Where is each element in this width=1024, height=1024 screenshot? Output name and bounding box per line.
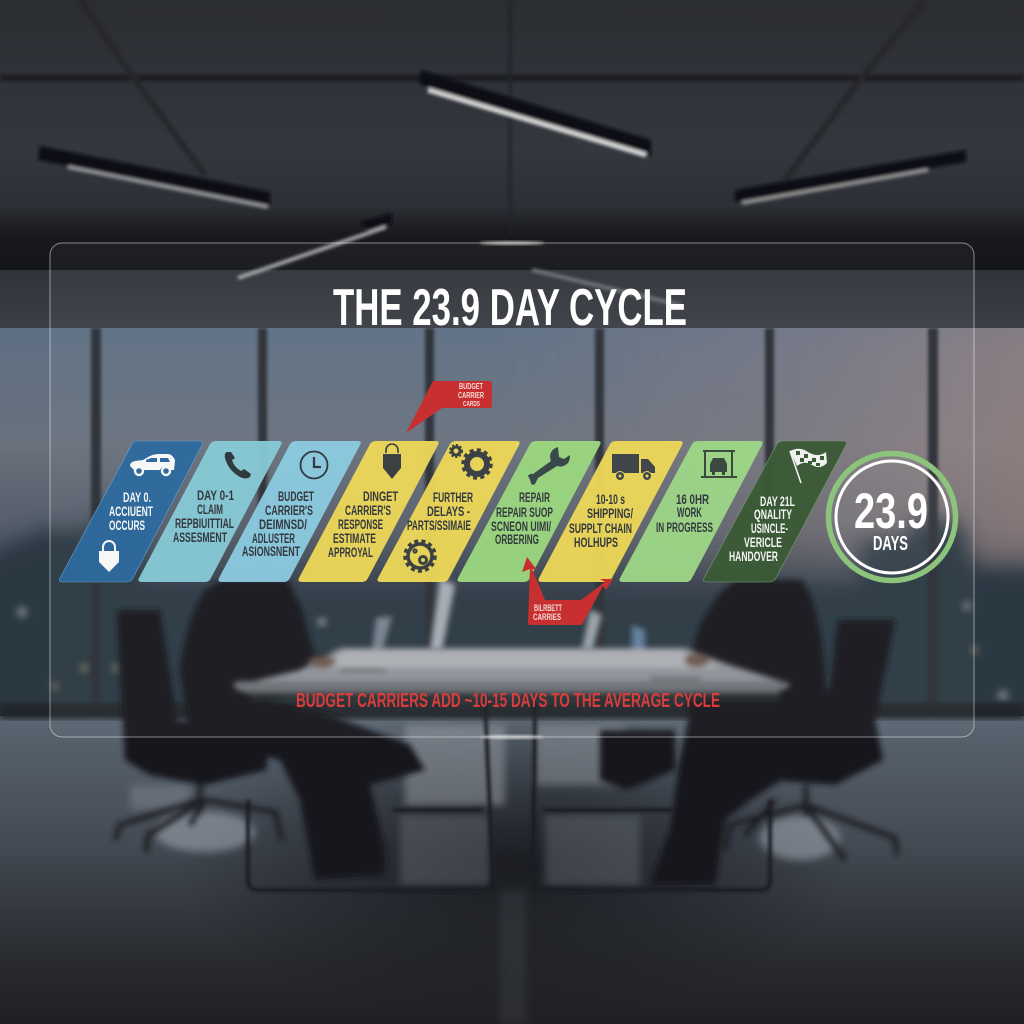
seated people and chairs xyxy=(115,580,897,885)
icon: wrench xyxy=(528,447,570,485)
right chair xyxy=(770,620,895,785)
step text xyxy=(328,489,399,560)
step text: CARRIER'S xyxy=(345,503,391,518)
icon: shield lock xyxy=(99,541,119,572)
table legs and frame xyxy=(248,700,770,890)
windows and city skyline xyxy=(0,328,1024,715)
step text: VERICLE xyxy=(744,535,782,550)
step text: DINGET xyxy=(363,489,399,504)
panel: work in progress xyxy=(619,441,763,582)
ceiling lights xyxy=(38,70,966,305)
step text: DEIMNSD/ xyxy=(259,517,307,532)
callout: budget carriers bottom with two arrows: BILRBETT xyxy=(534,603,562,613)
step text: FURTHER xyxy=(433,490,473,505)
step text: HOLHUPS xyxy=(574,535,618,550)
step text: REPAIR xyxy=(519,490,550,505)
callout: budget carriers bottom with two arrows xyxy=(522,557,613,625)
step text: ADLUSTER xyxy=(252,531,295,546)
callout: budget carrier top: CARRIER xyxy=(458,391,484,400)
step text: BUDGET xyxy=(278,489,314,504)
step text xyxy=(569,492,633,550)
monitors and laptops xyxy=(317,578,645,655)
step text xyxy=(729,494,795,564)
step text: ASSESMENT xyxy=(173,530,227,545)
panel: further delays xyxy=(377,441,520,582)
left person xyxy=(180,580,425,880)
step text xyxy=(656,492,713,535)
step text: REPAIR SUOP xyxy=(496,505,553,520)
panel: claim reported xyxy=(138,441,282,582)
step text: DAY 0-1 xyxy=(197,488,234,503)
icon: phone xyxy=(225,452,251,478)
title: THE 23.9 DAY CYCLE xyxy=(333,279,687,337)
step text: ASIONSNENT xyxy=(242,544,300,559)
icon: gears xyxy=(450,445,491,478)
step text: OCCURS xyxy=(109,518,145,533)
panel: quality check and vehicle handover xyxy=(703,441,847,582)
step text: USINCLE- xyxy=(751,521,788,536)
icon: delay gear xyxy=(405,541,435,571)
icon: checkered flag xyxy=(790,449,827,483)
step text: CARRIER'S xyxy=(265,503,313,518)
panel: repair shop scheduling and ordering xyxy=(457,441,601,582)
step text: 16 0HR xyxy=(676,492,709,507)
step text: 10-10 s xyxy=(596,492,625,507)
panel: shipping and supply chain holdups xyxy=(538,441,683,582)
glass panel xyxy=(50,241,974,739)
callout: budget carriers bottom with two arrows: CARRIES xyxy=(533,612,561,622)
icon: car on lift xyxy=(701,451,737,478)
step text: RESPONSE xyxy=(338,517,383,532)
conference table xyxy=(233,648,790,702)
panel: carrier's response estimate approval xyxy=(298,441,439,582)
total badge: 23.9 days xyxy=(828,454,956,580)
total badge: 23.9 days: DAYS xyxy=(873,533,908,555)
step text: SUPPLT CHAIN xyxy=(569,521,632,536)
step text: ACCIUENT xyxy=(109,504,153,519)
step text: DAY 0. xyxy=(123,490,151,505)
step text xyxy=(491,490,553,547)
step text: DELAYS - xyxy=(427,504,470,519)
panel: day 0 accident occurs xyxy=(59,441,203,582)
step text: QNALITY xyxy=(754,507,792,522)
icon: car xyxy=(130,454,175,475)
step text xyxy=(242,489,314,559)
step text: IN PROGRESS xyxy=(656,520,713,535)
callout: budget carrier top: BUDGET xyxy=(459,382,483,391)
callout: budget carrier top: CARDS xyxy=(463,401,480,408)
left chair xyxy=(117,610,267,785)
total badge: 23.9 days: 23.9 xyxy=(854,483,928,539)
step text: SCNEON UIMI/ xyxy=(491,519,551,534)
icon: truck xyxy=(612,454,655,480)
step text: HANDOVER xyxy=(729,549,778,564)
step text: SHIPPING/ xyxy=(587,506,633,521)
step text: CLAIM xyxy=(197,502,223,517)
floor xyxy=(0,703,1024,1024)
step text xyxy=(173,488,234,545)
footer note: BUDGET CARRIERS ADD ~10-15 DAYS TO THE AVERAGE CYCLE xyxy=(296,690,720,712)
icon: shield lock xyxy=(383,444,401,479)
step text: ORBERING xyxy=(495,532,539,547)
step text xyxy=(109,490,153,533)
step text: PARTS/SSIMAIE xyxy=(407,518,471,533)
panel: budget carrier's demand xyxy=(218,441,361,582)
step text xyxy=(407,490,473,533)
step text: DAY 21L xyxy=(760,494,795,509)
icon: clock xyxy=(300,452,328,478)
ceiling xyxy=(0,0,1024,328)
right person xyxy=(650,580,830,885)
callout: budget carrier top xyxy=(406,381,492,433)
step text: REPBIUITTIAL xyxy=(175,516,234,531)
step text: APPROYAL xyxy=(328,545,373,560)
step text: WORK xyxy=(677,505,702,520)
step text: ESTIMATE xyxy=(333,531,376,546)
